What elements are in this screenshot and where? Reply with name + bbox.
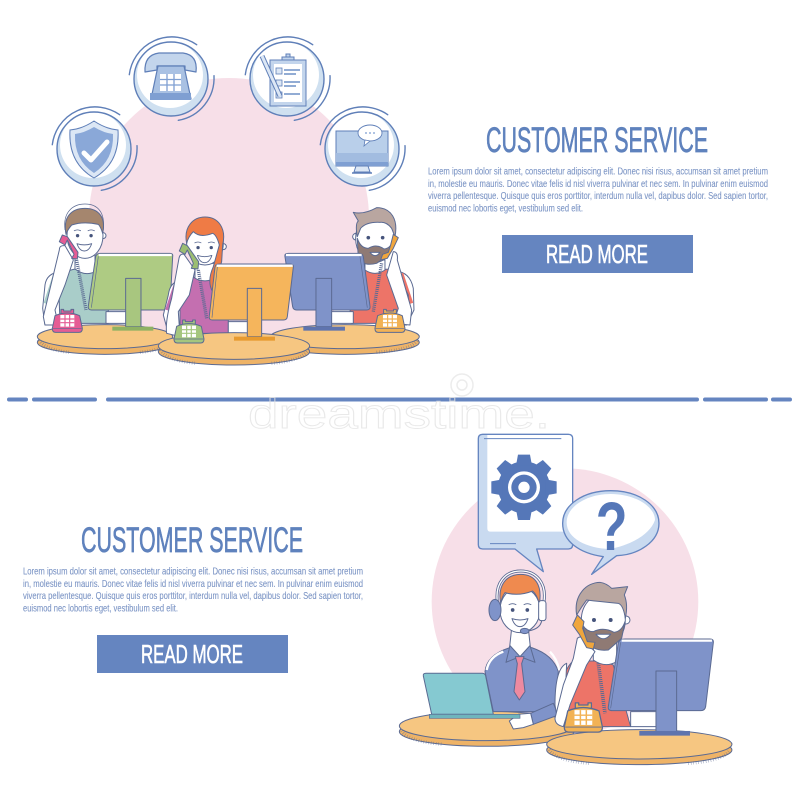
icon: pink desk phone — [52, 309, 82, 332]
monitor: blue — [608, 639, 713, 736]
speech box: gear — [478, 434, 573, 572]
support scene — [399, 434, 732, 765]
monitor: orange — [209, 264, 293, 341]
monitor: blue — [285, 253, 370, 331]
icon: shield badge — [52, 107, 137, 190]
button: top read more: READ MORE — [546, 239, 648, 269]
text block: bottom: viverra pellentesque. Quisque quis eros porttitor, interdum nulla vel, dapibus dolor. Sed sapien tortor, — [23, 590, 363, 602]
desk: left — [37, 325, 173, 354]
speech bubble: question: ? — [596, 488, 628, 565]
text block: bottom: in, molestie eu mauris. Donec vitae felis id nisl viverra pulvinar et nec sem. In pulvinar enim euismod — [23, 578, 363, 590]
person: right agent — [325, 208, 414, 325]
icon: gear — [478, 441, 570, 534]
person: headset agent — [485, 571, 559, 729]
desk: left — [399, 711, 574, 746]
person: phone agent — [555, 582, 657, 727]
icon: monitor badge — [320, 107, 405, 190]
text block: top: euismod nec lobortis eget, vestibulum sed elit. — [428, 202, 583, 214]
button: top read more — [502, 235, 693, 273]
pink circle: top scene — [89, 78, 369, 358]
watermark: dreamstime. — [248, 390, 550, 437]
icon: orange desk phone — [564, 703, 602, 732]
watermark — [248, 374, 550, 437]
desk: centre — [158, 333, 310, 365]
team scene — [37, 204, 419, 365]
button: bottom read more: READ MORE — [141, 639, 243, 669]
laptop — [423, 673, 520, 718]
heading: bottom: CUSTOMER SERVICE — [81, 521, 303, 560]
button: bottom read more — [97, 635, 288, 673]
text block: top — [428, 166, 768, 214]
pink circle: bottom scene — [432, 468, 698, 735]
desk: right — [547, 730, 732, 765]
icon: orange desk phone — [375, 309, 405, 332]
monitor: green — [88, 253, 173, 331]
icon: telephone badge — [129, 37, 214, 120]
text block: bottom — [23, 566, 363, 614]
icon: green desk phone — [174, 320, 204, 343]
text block: bottom: euismod nec lobortis eget, vestibulum sed elit. — [23, 602, 178, 614]
text block: bottom: Lorem ipsum dolor sit amet, consectetur adipiscing elit. Donec nisi risus, accumsan sit amet pretium — [23, 566, 363, 578]
speech bubble: question — [563, 488, 659, 574]
icon: checklist badge — [245, 37, 330, 120]
desk: right — [271, 325, 419, 354]
divider — [9, 398, 790, 402]
person: middle agent — [163, 217, 248, 337]
person: left agent — [43, 204, 130, 325]
